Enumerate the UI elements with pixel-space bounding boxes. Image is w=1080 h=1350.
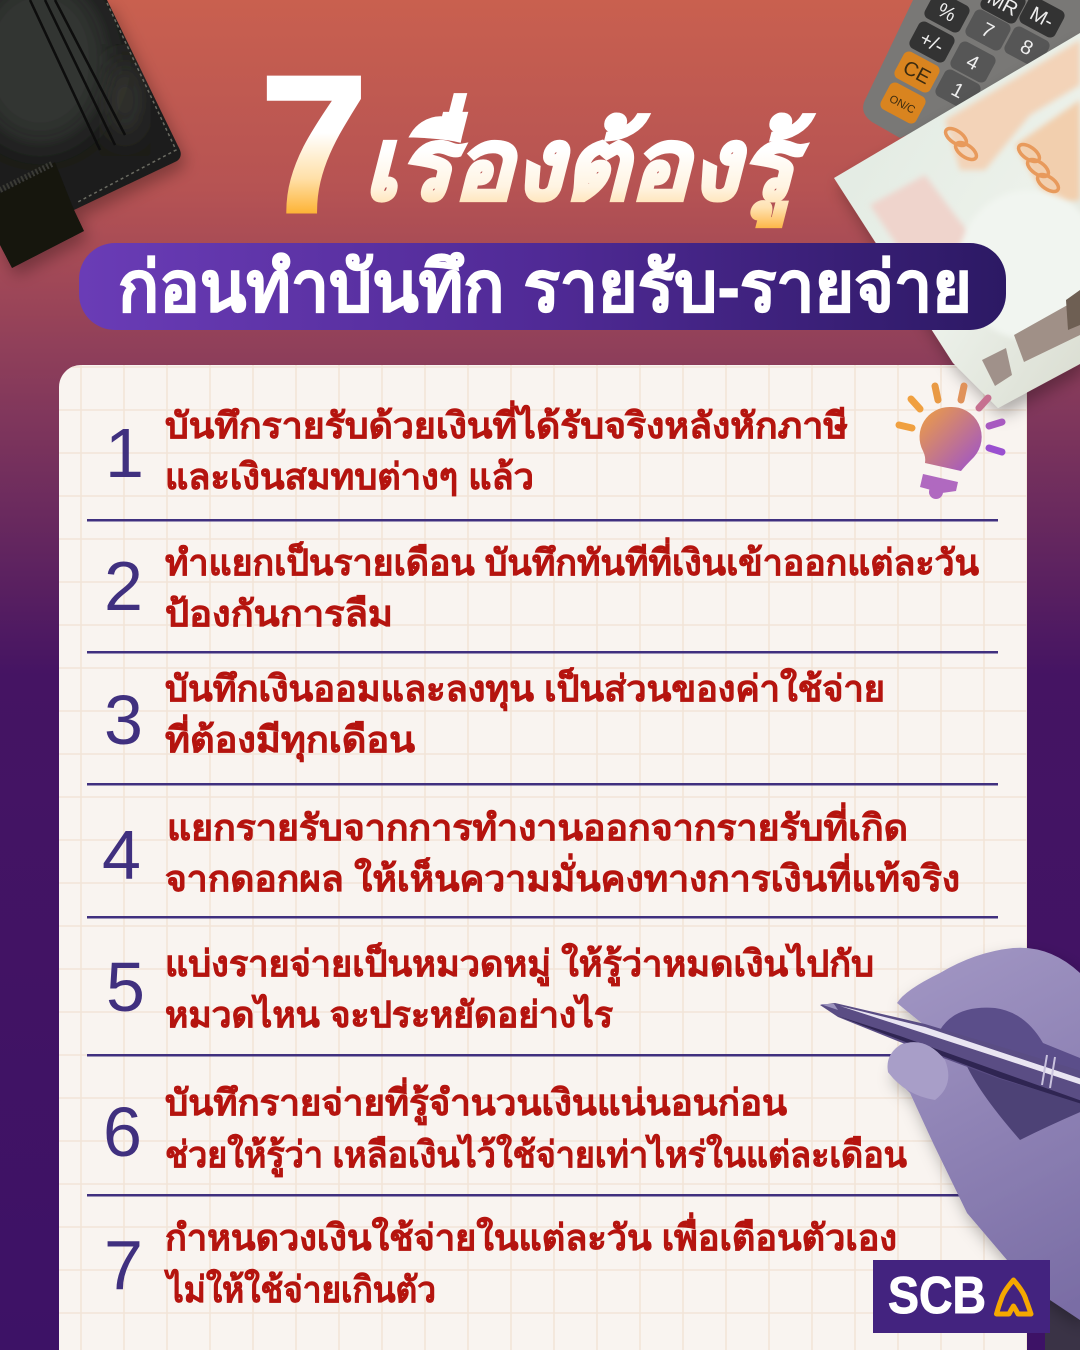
item 5: หมวดไหน จะประหยัดอย่างไร — [165, 993, 614, 1035]
icon: light bulb — [899, 386, 1002, 499]
calculator keys: 1 — [947, 79, 968, 103]
calculator keys: 8 — [1016, 36, 1037, 60]
item 4: จากดอกผล ให้เห็นความมั่นคงทางการเงินที่แท้จริง — [165, 853, 960, 899]
icon: bodhi leaf — [996, 1280, 1031, 1314]
item 3: บันทึกเงินออมและลงทุน เป็นส่วนของค่าใช้จ่าย — [165, 666, 885, 712]
calculator keys: ON/C — [887, 93, 917, 117]
pen — [820, 1003, 1080, 1104]
item 2: ป้องกันการลืม — [165, 593, 393, 634]
item 2: ทำแยกเป็นรายเดือน บันทึกทันทีที่เงินเข้าออกแต่ละวัน — [165, 537, 979, 583]
calculator keys: CE — [899, 57, 934, 89]
item 4: แยกรายรับจากการทำงานออกจากรายรับที่เกิด — [167, 802, 908, 848]
panel: notebook paper — [59, 365, 1027, 1350]
item 6: ช่วยให้รู้ว่า เหลือเงินไว้ใช้จ่ายเท่าไหร่ในแต่ละเดือน — [165, 1133, 907, 1178]
title number 7: 7 — [260, 35, 368, 254]
item 1 — [105, 400, 848, 497]
logo: SCB — [873, 1260, 1050, 1333]
item 4 — [102, 802, 960, 899]
title — [260, 35, 814, 254]
shadow between fingers below pen — [965, 1062, 1080, 1140]
calculator keys — [878, 0, 1067, 126]
photo: calculator — [863, 0, 1080, 138]
sleeve — [1045, 1295, 1080, 1350]
subtitle pill: ก่อนทำบันทึก รายรับ-รายจ่าย — [118, 248, 972, 326]
item 5: แบ่งรายจ่ายเป็นหมวดหมู่ ให้รู้ว่าหมดเงินไปกับ — [165, 941, 874, 987]
logo: SCB: SCB — [888, 1267, 986, 1325]
item 1: บันทึกรายรับด้วยเงินที่ได้รับจริงหลังหักภาษี — [165, 400, 848, 446]
item 5: 5 — [106, 948, 145, 1026]
item 6: บันทึกรายจ่ายที่รู้จำนวนเงินแน่นอนก่อน — [165, 1077, 787, 1126]
item 6 — [103, 1077, 907, 1178]
item 1: 1 — [105, 414, 144, 492]
calculator keys: +/- — [916, 28, 947, 58]
thumb — [888, 1042, 948, 1100]
banknote numerals — [943, 125, 1061, 195]
item 2 — [104, 537, 979, 634]
calculator keys: M- — [1026, 3, 1057, 33]
photo: thai banknotes — [834, 33, 1080, 408]
item 3: 3 — [104, 681, 143, 759]
item 3: ที่ต้องมีทุกเดือน — [165, 714, 415, 763]
item 2: 2 — [104, 547, 143, 625]
item 5 — [106, 941, 874, 1035]
item 6: 6 — [103, 1093, 142, 1171]
item 3 — [104, 666, 885, 763]
item 7: ไม่ให้ใช้จ่ายเกินตัว — [163, 1268, 436, 1310]
photo: hand holding pen — [820, 948, 1080, 1350]
calculator keys: 4 — [962, 51, 983, 75]
item 7: 7 — [104, 1226, 143, 1304]
calculator keys: 7 — [977, 19, 998, 43]
photo: black leather wallet — [0, 0, 181, 268]
title text: เรื่องต้องรู้ — [363, 94, 814, 227]
item 7 — [104, 1212, 897, 1310]
item 1: และเงินสมทบต่างๆ แล้ว — [165, 456, 534, 497]
item 7: กำหนดวงเงินใช้จ่ายในแต่ละวัน เพื่อเตือนตัวเอง — [165, 1212, 897, 1258]
shadow between fingers above pen — [940, 1008, 1080, 1075]
item 4: 4 — [102, 816, 141, 894]
